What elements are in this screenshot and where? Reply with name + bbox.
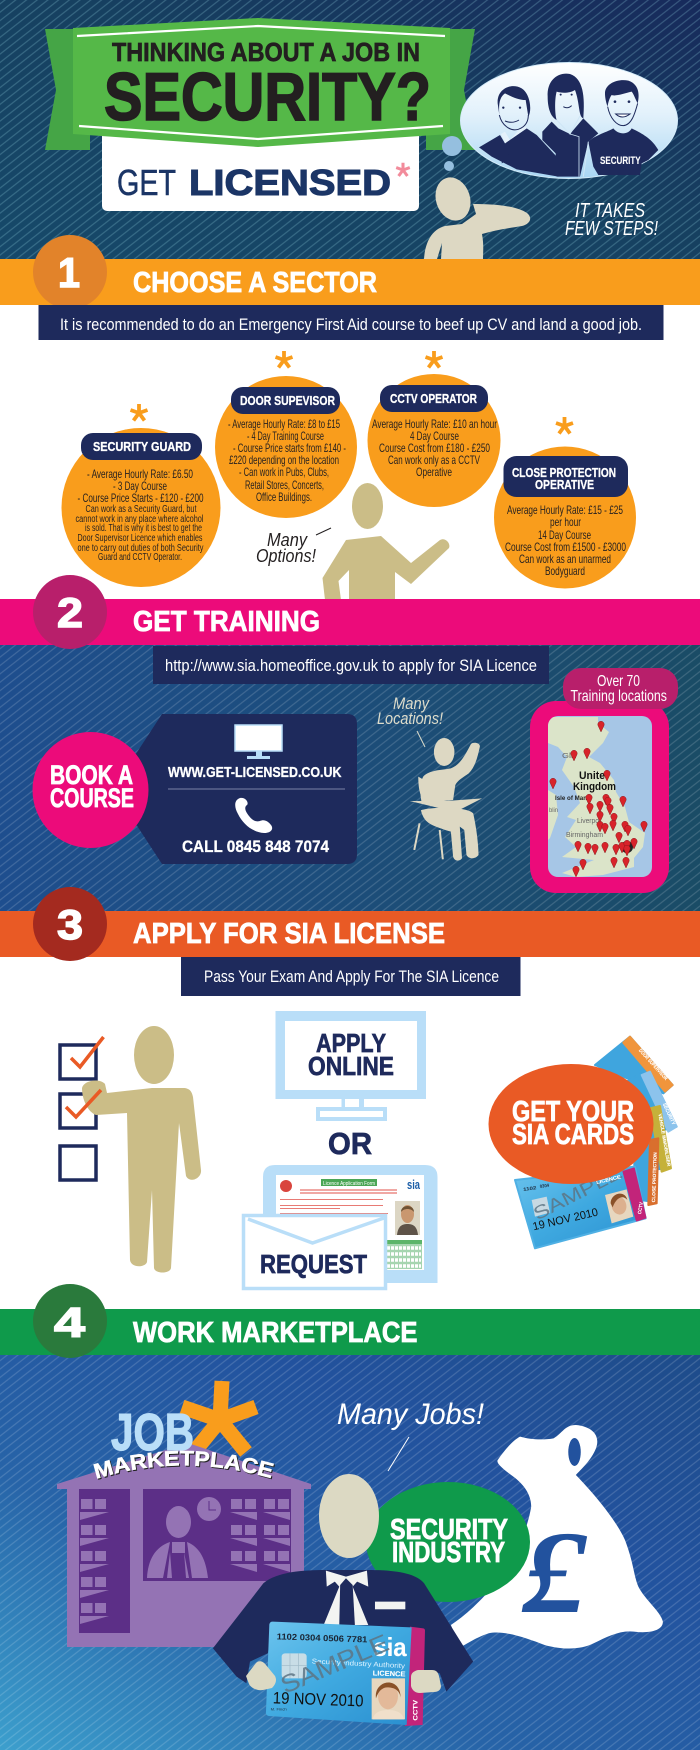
sector: cctv operator: Operative xyxy=(416,465,452,479)
caption: many jobs xyxy=(337,1398,485,1471)
icon: monitor apply online: APPLY xyxy=(316,1028,386,1058)
figure: student at desk xyxy=(410,738,482,861)
note band: pass your exam xyxy=(181,957,520,996)
sia card fan: CLOSE PROTECTION xyxy=(651,1152,658,1202)
callout: get your sia cards: SIA CARDS xyxy=(512,1119,634,1151)
sector: door supervisor xyxy=(215,351,357,518)
sector: security guard xyxy=(62,404,220,587)
sector: security guard: one to carry out duties of both Security xyxy=(78,543,204,554)
panel: licence application form: Licence Application Form xyxy=(323,1181,375,1187)
banner: green ribbon with title xyxy=(45,18,475,211)
licence card: M. Finch xyxy=(271,1708,287,1712)
note band: pass your exam: Pass Your Exam And Apply For The SIA Licence xyxy=(204,967,499,986)
sia card fan: 19 NOV 2010 xyxy=(532,1207,599,1233)
title line two: SECURITY? xyxy=(104,59,431,135)
callout: over 70 training locations xyxy=(563,668,678,709)
sia card fan: SAMPLE xyxy=(530,1162,625,1224)
sector: door supervisor: Office Buildings. xyxy=(256,490,312,504)
callout: get your sia cards xyxy=(488,1064,654,1184)
step 1 banner: choose a sector: CHOOSE A SECTOR xyxy=(133,267,377,299)
callout: get your sia cards: GET YOUR xyxy=(512,1096,634,1128)
figure: thinking man xyxy=(424,173,530,259)
sector: door supervisor: - Can work in Pubs, Clubs, xyxy=(239,465,329,479)
sia card fan: LICENCE xyxy=(596,1174,622,1186)
panel: contact details: WWW.GET-LICENSED.CO.UK xyxy=(168,764,342,781)
panel: contact details xyxy=(130,714,357,864)
licence card: 19 NOV 2010 xyxy=(273,1688,364,1710)
step 2 banner: get training xyxy=(0,575,700,649)
map of uk with training pins: Liverpo xyxy=(577,818,599,825)
checklist boxes xyxy=(60,1045,96,1180)
note band: sia url xyxy=(153,646,549,684)
map of uk with training pins: Birmingham xyxy=(566,832,603,839)
step 1 banner: choose a sector xyxy=(0,235,700,309)
building: job marketplace xyxy=(57,1443,311,1647)
licence card: CCTV xyxy=(413,1699,420,1721)
panel: step 2 background xyxy=(0,645,700,911)
sector: cctv operator: Average Hourly Rate: £10 an hour xyxy=(372,417,497,431)
callout: book a course xyxy=(32,732,148,848)
sector: security guard: - Average Hourly Rate: £6.50 xyxy=(87,467,193,481)
callout: over 70 training locations: Training locations xyxy=(570,688,667,705)
sector: door supervisor: DOOR SUPEVISOR xyxy=(240,393,335,408)
map of uk with training pins xyxy=(548,716,652,877)
panel: licence application form xyxy=(263,1165,438,1283)
step 4 banner: work marketplace: 4 xyxy=(54,1299,86,1346)
sia card fan: SECURITY xyxy=(661,1102,676,1127)
panel: contact details: CALL 0845 848 7074 xyxy=(182,837,329,856)
step 3 banner: apply for sia license: 3 xyxy=(57,901,83,948)
step 1 banner: choose a sector: 1 xyxy=(58,249,80,296)
clerk in window xyxy=(147,1506,208,1578)
sia card fan xyxy=(515,1037,677,1248)
photo: applicant xyxy=(395,1201,420,1235)
icon: large orange asterisk xyxy=(182,1381,256,1452)
caption: it takes few steps: FEW STEPS! xyxy=(565,218,658,240)
callout: over 70 training locations: Over 70 xyxy=(597,673,640,690)
sector: door supervisor: Retail Stores, Concerts, xyxy=(245,478,324,492)
sector: security guard: is sold. That is why it is best to get the xyxy=(85,523,202,534)
step 3 banner: apply for sia license: APPLY FOR SIA LICENSE xyxy=(133,918,445,950)
licence card: LICENCE xyxy=(373,1670,406,1678)
sector: cctv operator: Can work only as a CCTV xyxy=(388,453,480,467)
sector: close protection operative: OPERATIVE xyxy=(535,477,594,492)
sector: door supervisor: - Average Hourly Rate: £8 to £15 xyxy=(228,417,340,431)
icon: monitor apply online: ONLINE xyxy=(308,1051,394,1081)
step 4 banner: work marketplace: WORK MARKETPLACE xyxy=(133,1317,418,1349)
sia card fan: VEHICLE IMMOBILISER xyxy=(657,1113,672,1167)
map of uk with training pins: Isle of Man xyxy=(555,796,587,802)
label: or: OR xyxy=(328,1126,372,1161)
licence card: sia xyxy=(373,1632,407,1662)
sia card fan: CCTV xyxy=(637,1201,645,1215)
sector: security guard: Can work as a Security Guard, but xyxy=(86,504,197,515)
sia card fan: 1102 xyxy=(523,1185,537,1192)
icon: money bag with pound sign xyxy=(451,1425,663,1649)
sector: close protection operative: per hour xyxy=(550,515,581,529)
hands xyxy=(246,1661,441,1693)
sector: close protection operative: Average Hourly Rate: £15 - £25 xyxy=(507,503,623,517)
callout: security industry xyxy=(366,1482,530,1602)
icon: monitor apply online xyxy=(276,1011,426,1121)
thought bubble with three security staff xyxy=(442,62,678,178)
sector: security guard: Door Supervisor Licence which enables xyxy=(78,533,202,544)
callout: book a course: BOOK A xyxy=(50,760,133,790)
sector: cctv operator xyxy=(368,351,500,507)
licence card xyxy=(266,1622,425,1726)
thought bubble with three security staff: SECURITY xyxy=(600,155,641,167)
sector: security guard: cannot work in any place where alcohol xyxy=(76,514,204,525)
sector: security guard: - Course Price Starts - £120 - £200 xyxy=(78,491,204,505)
figure: man ticking checklist xyxy=(82,1026,201,1272)
figure: man in suit holding card xyxy=(213,1474,473,1726)
sector: close protection operative: Can work as an unarmed xyxy=(519,552,611,566)
callout: security industry: INDUSTRY xyxy=(392,1537,505,1569)
callout: book a course: COURSE xyxy=(50,783,134,813)
licence card: Security Industry Authority xyxy=(312,1658,406,1670)
callout: security industry: SECURITY xyxy=(390,1514,508,1546)
licence card: 1102 0304 0506 7781 xyxy=(277,1631,368,1645)
icon: telephone xyxy=(235,798,272,833)
caption: many locations xyxy=(377,694,443,747)
photo: card holder xyxy=(372,1678,405,1719)
sector: cctv operator: 4 Day Course xyxy=(410,429,459,443)
sector: close protection operative: 14 Day Course xyxy=(538,528,591,542)
step 4 banner: work marketplace xyxy=(0,1284,700,1358)
sector: door supervisor: - Course Price starts from £140 - xyxy=(233,441,346,455)
licence card: SAMPLE xyxy=(277,1630,393,1700)
step 2 banner: get training: 2 xyxy=(57,589,83,636)
icon: envelope request: REQUEST xyxy=(260,1249,367,1279)
icon: clock xyxy=(197,1497,221,1521)
caption: it takes few steps: IT TAKES xyxy=(575,200,646,222)
sector: door supervisor: - 4 Day Training Course xyxy=(247,429,324,443)
map of uk with training pins: Gla xyxy=(562,753,576,760)
panel: get licensed card: GET xyxy=(117,162,176,203)
note band: sia url: http://www.sia.homeoffice.gov.uk to apply for SIA Licence xyxy=(165,656,537,675)
step 2 banner: get training: GET TRAINING xyxy=(133,606,320,638)
sector: cctv operator: Course Cost from £180 - £250 xyxy=(379,441,490,455)
icon: envelope request xyxy=(244,1216,386,1288)
sector: cctv operator: CCTV OPERATOR xyxy=(390,391,477,406)
figure: presenter pointing xyxy=(322,483,449,600)
panel: licence application form: sia xyxy=(407,1177,421,1192)
caption: many locations: Many xyxy=(393,694,430,713)
caption: many options: Many xyxy=(267,530,308,550)
map of uk with training pins: blin xyxy=(549,808,558,814)
sign: marketplace: MARKETPLACE xyxy=(93,1450,275,1480)
panel: get licensed card xyxy=(102,125,419,211)
note band: first aid recommendation xyxy=(38,305,664,340)
sia card fan: DOOR SUPERVISOR xyxy=(637,1048,669,1082)
sector: door supervisor: £220 depending on the location xyxy=(229,453,339,467)
sector: security guard: SECURITY GUARD xyxy=(93,439,191,454)
caption: many locations: Locations! xyxy=(377,709,443,728)
map of uk with training pins: Kingdom xyxy=(573,781,616,793)
sia card fan: 0304 xyxy=(539,1183,550,1189)
sector: close protection operative xyxy=(494,417,636,588)
sector: security guard: - 3 Day Course xyxy=(113,479,167,493)
sign: job: JOB xyxy=(111,1404,194,1462)
panel: header background xyxy=(0,0,700,260)
sector: close protection operative: Course Cost from £1500 - £3000 xyxy=(505,540,626,554)
icon: money bag with pound sign: £ xyxy=(521,1507,588,1638)
caption: many options: Options! xyxy=(256,546,316,566)
map of uk with training pins: Unite xyxy=(579,770,605,782)
sector: close protection operative: CLOSE PROTECTION xyxy=(512,465,616,480)
caption: many jobs: Many Jobs! xyxy=(337,1398,485,1431)
title line one: THINKING ABOUT A JOB IN xyxy=(112,37,420,67)
check marks xyxy=(66,1037,104,1117)
panel: get licensed card: LICENSED xyxy=(189,162,391,203)
panel: map frame xyxy=(530,701,669,893)
caption: many options xyxy=(256,528,331,566)
sector: close protection operative: Bodyguard xyxy=(545,564,585,578)
caption: it takes few steps xyxy=(565,200,658,240)
icon: monitor xyxy=(235,725,282,759)
sector: security guard: Guard and CCTV Operator. xyxy=(98,552,182,563)
panel: step 4 background xyxy=(0,1355,700,1750)
step 3 banner: apply for sia license xyxy=(0,887,700,961)
